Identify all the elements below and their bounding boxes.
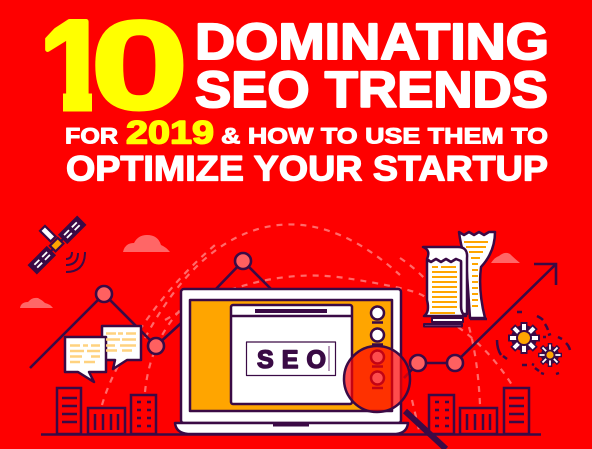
front receipt: [423, 247, 467, 326]
search box: [246, 342, 336, 376]
dashed connection arcs: [102, 224, 512, 434]
heading line: seo trends: SEO TRENDS: [195, 61, 548, 118]
subheading: 2019: 2019: [126, 114, 214, 150]
back receipt: [459, 232, 495, 319]
solar panel lower: [29, 247, 55, 273]
trend nodes: [96, 253, 463, 371]
title: [45, 19, 548, 182]
bubble front: [65, 337, 106, 382]
building 6: [504, 388, 529, 434]
ground line: [41, 433, 541, 436]
orange screen: [190, 300, 392, 411]
receipt roll: [432, 318, 463, 322]
icon: receipts: [423, 232, 495, 326]
building 4: [429, 395, 454, 434]
icon: gears: [497, 312, 570, 374]
building 1: [57, 388, 81, 434]
buildings left: [57, 388, 156, 434]
laptop notch: [273, 423, 309, 426]
heading line: dominating: DOMINATING: [195, 13, 549, 70]
seo text: SEO: [257, 346, 326, 374]
laptop: [175, 289, 408, 434]
bubble text lines: [70, 334, 136, 362]
subheading: how to use them: & HOW TO USE THEM TO: [221, 124, 548, 148]
magnifying glass: [344, 346, 446, 449]
building 2: [88, 408, 125, 434]
buildings right: [429, 388, 529, 434]
building 3: [131, 395, 156, 434]
trend line: [30, 261, 556, 378]
body: [50, 238, 63, 251]
clouds: [20, 235, 520, 308]
subheading: for: FOR: [65, 124, 118, 148]
speech bubbles: [65, 326, 141, 382]
bubble back: [102, 326, 141, 369]
browser window: [231, 305, 352, 404]
window title bar: [231, 309, 352, 316]
solar panel upper: [59, 217, 85, 243]
body strip: [40, 226, 56, 241]
building 5: [460, 408, 497, 434]
side buttons: [371, 306, 384, 388]
subheading: optimize your startup: OPTIMIZE YOUR STARTUP: [66, 150, 548, 188]
small gear: [538, 343, 562, 367]
handle: [405, 411, 446, 449]
gear orbit dashes: [497, 312, 570, 374]
icon: satellite: [17, 205, 85, 273]
lens: [344, 346, 410, 412]
large gear: [508, 322, 540, 354]
signal arcs: [66, 252, 85, 272]
text cursor: [328, 346, 330, 371]
laptop base: [175, 423, 408, 434]
laptop body: [181, 289, 401, 423]
